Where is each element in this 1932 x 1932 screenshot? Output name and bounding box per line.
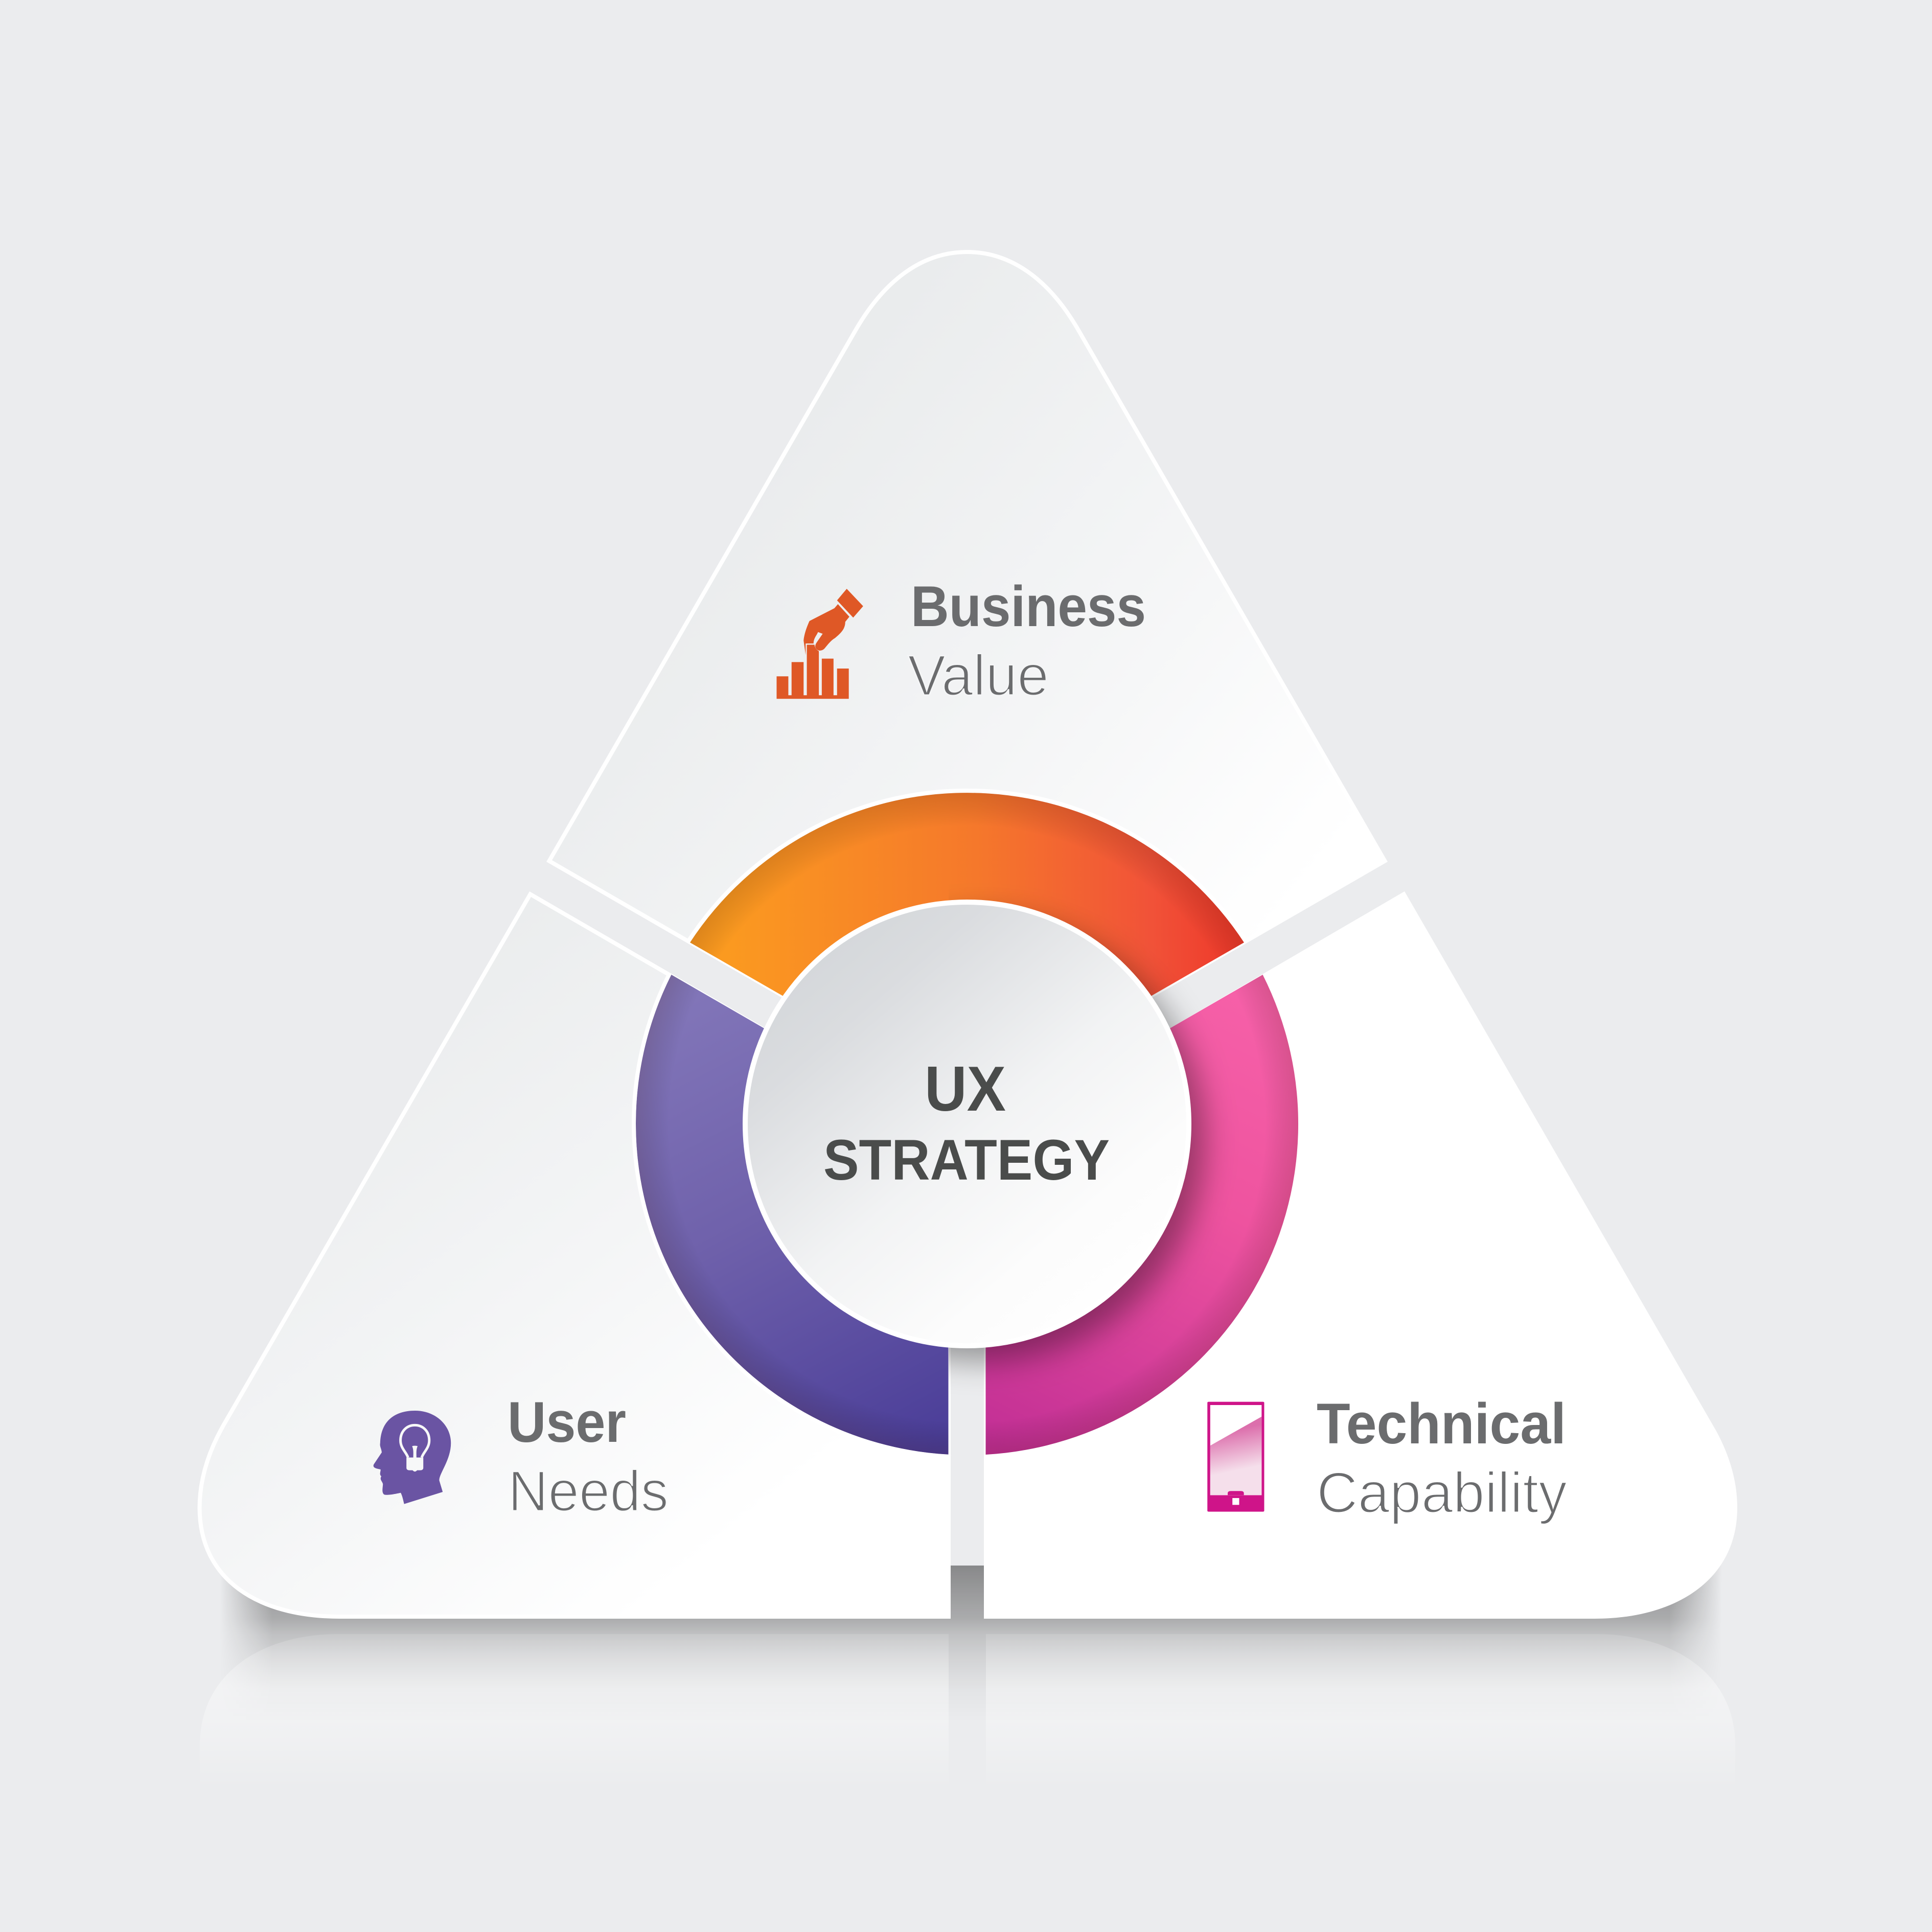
label: Technical Capability: Technical xyxy=(1317,1392,1566,1456)
centre title xyxy=(823,1054,1110,1192)
label: Technical Capability xyxy=(1317,1392,1567,1525)
label: Business Value: Value xyxy=(908,643,1049,707)
panel: Technical Capability xyxy=(984,891,1737,1619)
centre title: STRATEGY xyxy=(823,1128,1110,1192)
icon: mobile phone xyxy=(1207,1402,1264,1512)
centre circle xyxy=(745,902,1189,1346)
label: User Needs: User xyxy=(508,1390,626,1454)
panel: User Needs xyxy=(199,894,949,1617)
icon: head with light bulb xyxy=(374,1411,451,1504)
label: Business Value: Business xyxy=(911,574,1146,638)
centre title: UX xyxy=(925,1054,1006,1124)
icon: hand placing bar on chart xyxy=(776,589,863,699)
panel reflections xyxy=(200,1634,1735,1789)
centre circle shadow xyxy=(949,898,1225,1381)
label: User Needs: Needs xyxy=(508,1459,669,1523)
ring white outer outline xyxy=(634,791,1246,1457)
ring gap shadow strip xyxy=(951,1452,984,1566)
label: User Needs xyxy=(508,1390,669,1523)
ring outer edge shading xyxy=(636,793,1298,1455)
ring segment: pink xyxy=(985,975,1298,1455)
donut ring xyxy=(634,791,1298,1457)
label: Technical Capability: Capability xyxy=(1317,1461,1567,1525)
ring segment: orange xyxy=(690,793,1244,1001)
floor shadow xyxy=(224,1566,1718,1690)
panel: Business Value xyxy=(549,252,1385,1108)
ring segment: purple xyxy=(636,975,949,1455)
label: Business Value xyxy=(908,574,1146,707)
